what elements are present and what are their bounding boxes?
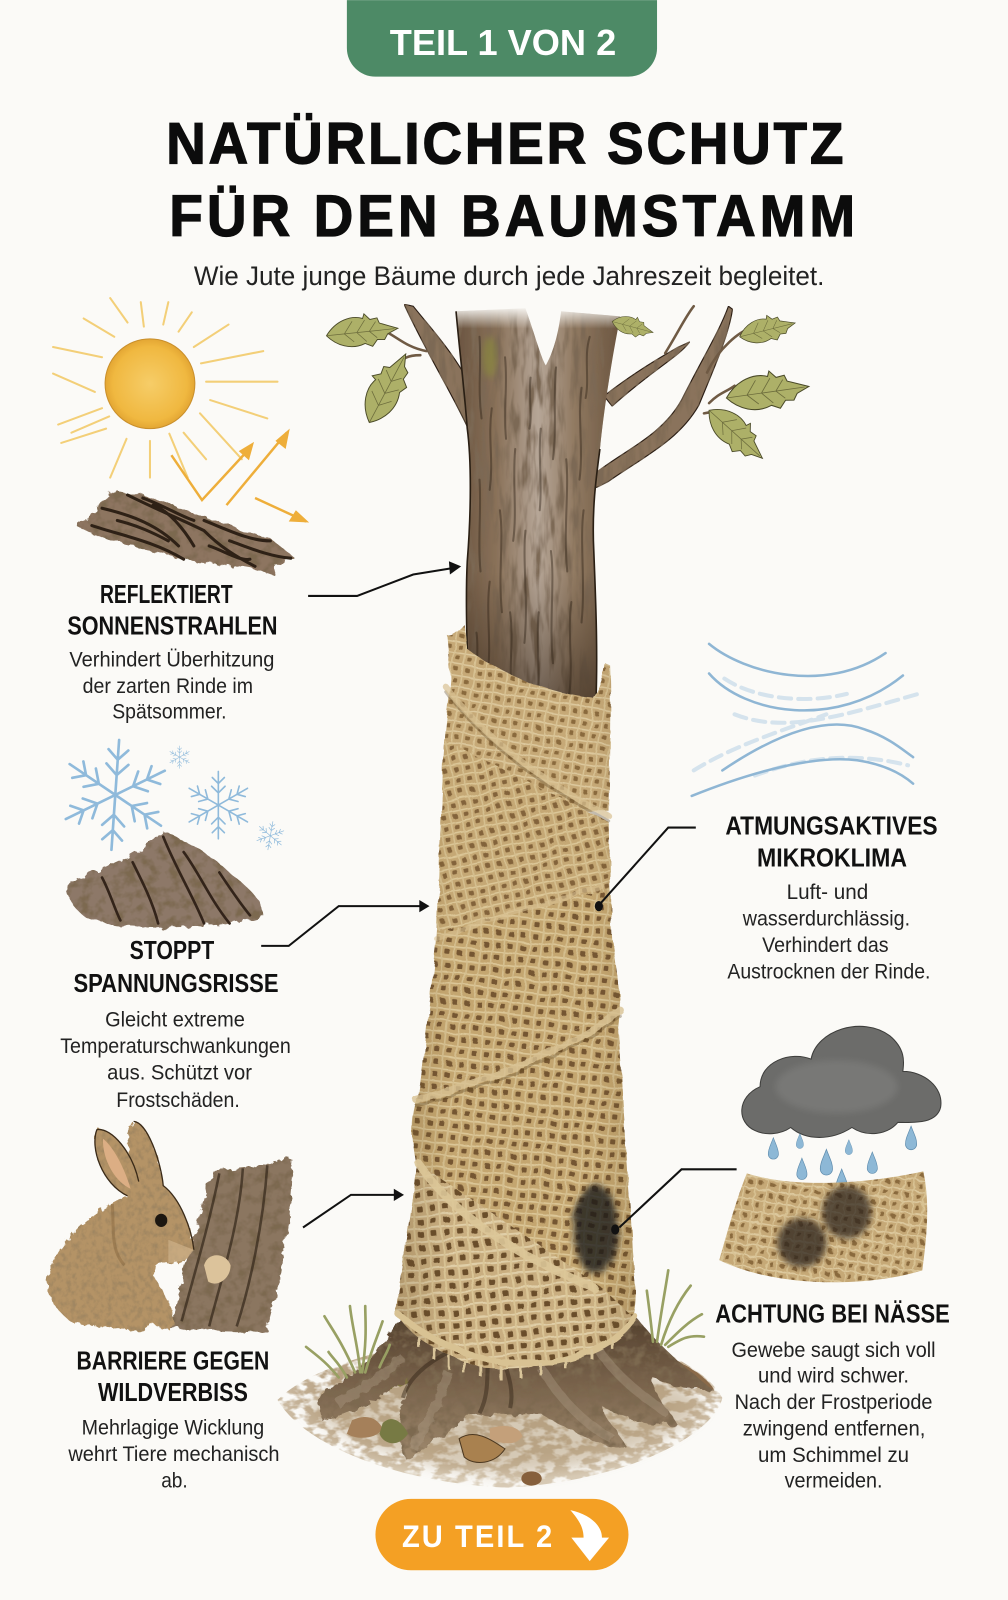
icon: rabbit and log [47, 1121, 293, 1332]
callout: atmungsaktives mikroklima: MIKROKLIMA [757, 844, 907, 872]
callout: reflektiert sonnenstrahlen [67, 581, 278, 723]
callout: stoppt spannungsrisse: Gleicht extreme [105, 1008, 245, 1031]
callout: achtung bei nässe: um Schimmel zu [758, 1444, 909, 1467]
callout: achtung bei nässe: zwingend entfernen, [743, 1418, 925, 1441]
callout: reflektiert sonnenstrahlen: Verhindert Überhitzung [69, 648, 274, 671]
callout: barriere gegen wildverbiss: ab. [161, 1470, 188, 1493]
callout: achtung bei nässe: und wird schwer. [758, 1365, 909, 1388]
trunk [456, 306, 622, 704]
icon: curved arrow [570, 1510, 609, 1561]
branches [404, 304, 733, 488]
icon: snowflakes [58, 736, 286, 854]
callout: barriere gegen wildverbiss: wehrt Tiere mechanisch [67, 1443, 280, 1466]
callout: stoppt spannungsrisse: STOPPT [130, 937, 215, 965]
jute fringe [418, 1337, 612, 1379]
callout: stoppt spannungsrisse: aus. Schützt vor [107, 1062, 252, 1085]
callout: achtung bei nässe: Nach der Frostperiode [735, 1391, 933, 1414]
subtitle: Wie Jute junge Bäume durch jede Jahreszeit begleitet. [194, 261, 824, 291]
title [166, 111, 855, 248]
callout: atmungsaktives mikroklima: wasserdurchlässig. [742, 907, 910, 930]
callout: atmungsaktives mikroklima: Austrocknen der Rinde. [727, 961, 930, 984]
icon: sun with reflected rays [53, 298, 309, 522]
callout: barriere gegen wildverbiss: Mehrlagige Wicklung [82, 1417, 264, 1440]
icon: rain cloud [742, 1026, 941, 1193]
banner: Teil 1 von 2 [347, 0, 657, 77]
arrow: reflektiert [308, 561, 461, 596]
callout: barriere gegen wildverbiss [67, 1347, 280, 1493]
callout: barriere gegen wildverbiss: BARRIERE GEGEN [77, 1347, 269, 1375]
arrow: barriere [303, 1189, 404, 1227]
callout: achtung bei nässe [715, 1300, 950, 1493]
button: zu Teil 2 [375, 1499, 628, 1570]
title: NATÜRLICHER SCHUTZ [166, 111, 843, 176]
illustration: tree with jute wrap [278, 304, 811, 1488]
button: zu Teil 2: ZU TEIL 2 [402, 1519, 552, 1554]
twigs [377, 306, 750, 413]
callout: reflektiert sonnenstrahlen: Spätsommer. [112, 700, 226, 723]
callout: atmungsaktives mikroklima: ATMUNGSAKTIVES [725, 813, 938, 841]
banner: Teil 1 von 2: TEIL 1 VON 2 [390, 23, 616, 63]
callout: atmungsaktives mikroklima [725, 813, 938, 984]
leaves [325, 309, 811, 470]
ground and roots [278, 1303, 722, 1488]
arrow: atmungsaktiv [595, 828, 696, 911]
callout: reflektiert sonnenstrahlen: REFLEKTIERT [100, 581, 233, 609]
callout: atmungsaktives mikroklima: Verhindert das [762, 934, 889, 957]
arrow: nässe [611, 1169, 737, 1235]
callout: stoppt spannungsrisse: Temperaturschwankungen [60, 1035, 291, 1058]
callout: achtung bei nässe: Gewebe saugt sich voll [732, 1339, 936, 1362]
callout: atmungsaktives mikroklima: Luft- und [787, 881, 868, 904]
title: FÜR DEN BAUMSTAMM [169, 183, 855, 248]
callout: achtung bei nässe: vermeiden. [785, 1470, 883, 1493]
jute wrap [383, 617, 648, 1383]
grass [306, 1270, 704, 1377]
callout: stoppt spannungsrisse: SPANNUNGSRISSE [73, 970, 279, 998]
icon: wind [692, 644, 918, 796]
arrow: stoppt [261, 900, 430, 946]
icon: wet jute patch [719, 1172, 928, 1282]
callout: barriere gegen wildverbiss: WILDVERBISS [98, 1379, 248, 1407]
callout: achtung bei nässe: ACHTUNG BEI NÄSSE [715, 1300, 950, 1328]
callout: stoppt spannungsrisse: Frostschäden. [116, 1089, 240, 1112]
icon: bark piece [77, 490, 294, 575]
icon: cracked bark [67, 832, 263, 927]
callout: reflektiert sonnenstrahlen: SONNENSTRAHLEN [67, 613, 278, 641]
callout: stoppt spannungsrisse [60, 937, 291, 1112]
callout: reflektiert sonnenstrahlen: der zarten Rinde im [83, 675, 253, 698]
